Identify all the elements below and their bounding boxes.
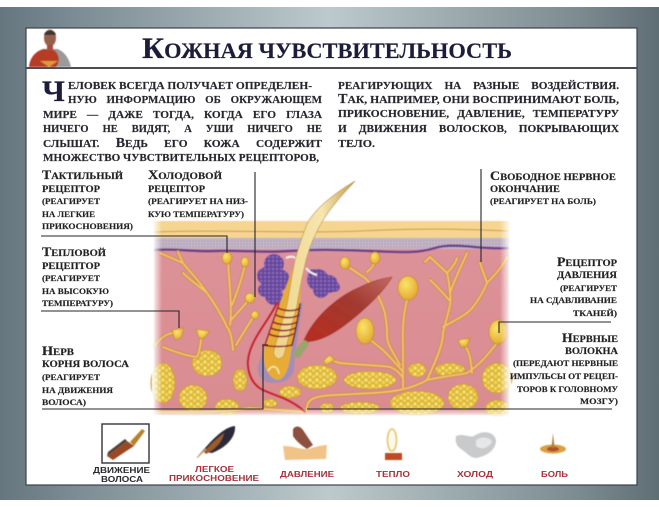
icon: heat	[385, 429, 402, 460]
caption: light touch	[169, 464, 259, 483]
sebaceous glands	[257, 254, 340, 305]
label: pressure receptor: ТКАНЕЙ)	[573, 308, 617, 318]
caption: hair movement: ВОЛОСА	[101, 474, 143, 484]
label: hair root nerve: (РЕАГИРУЕТ	[42, 372, 100, 382]
caption: pain: БОЛЬ	[541, 469, 568, 479]
text block: intro left column: ЕЛОВЕК ВСЕГДА ПОЛУЧАЕТ ОПРЕДЕЛЕН-	[68, 80, 312, 92]
label: hair root nerve: НЕРВ	[42, 344, 75, 358]
label: pressure receptor: НА СДАВЛИВАНИЕ	[530, 295, 617, 305]
text block: intro right column	[338, 80, 619, 150]
dermis	[154, 249, 509, 415]
soft edges	[152, 219, 162, 417]
drop cap: Ч	[42, 75, 65, 108]
text block: intro left column: МИРЕ — ДАЖЕ ТОГДА, КОГДА ЕГО ГЛАЗА	[43, 109, 322, 121]
label: heat receptor	[42, 245, 113, 308]
text block: intro right column: ПРИКОСНОВЕНИЕ, ДАВЛЕНИЕ, ТЕМПЕРАТУРУ	[338, 108, 619, 120]
caption: light touch: ПРИКОСНОВЕНИЕ	[169, 473, 259, 483]
callout lines	[41, 169, 612, 409]
label: hair root nerve: НА ДВИЖЕНИЯ	[42, 385, 113, 395]
label: tactile receptor: ТАКТИЛЬНЫЙ	[42, 168, 124, 182]
label: hair root nerve	[42, 344, 129, 407]
caption: cold: ХОЛОД	[457, 469, 493, 479]
nerve fibres	[154, 252, 507, 412]
label: cold receptor: (РЕАГИРУЕТ НА НИЗ-	[148, 196, 248, 206]
hair shaft	[274, 181, 355, 359]
caption: heat: ТЕПЛО	[376, 469, 410, 479]
label: tactile receptor: (РЕАГИРУЕТ	[42, 196, 100, 206]
text block: intro left column	[42, 75, 323, 164]
epidermis	[154, 221, 509, 241]
label: hair root nerve: КОРНЯ ВОЛОСА	[42, 360, 129, 370]
text block: intro left column: НИЧЕГО НЕ ВИДЯТ, А УШИ НИЧЕГО НЕ	[43, 123, 322, 135]
icon: pressure on skin	[283, 426, 327, 460]
label: cold receptor: РЕЦЕПТОР	[148, 185, 205, 195]
label: cold receptor: КУЮ ТЕМПЕРАТУРУ)	[148, 209, 244, 219]
label: nerve fibres: ИМПУЛЬСЫ ОТ РЕЦЕП-	[510, 371, 618, 381]
caption: hair movement	[93, 465, 150, 484]
label: cold receptor	[148, 168, 248, 219]
label: free nerve ending: СВОБОДНОЕ НЕРВНОЕ	[490, 169, 616, 183]
skin cross-section illustration	[151, 181, 512, 417]
arrector pili muscle	[293, 277, 392, 358]
text block: intro left column: СЛЫШАТ. ВЕДЬ ЕГО КОЖА СОДЕРЖИТ	[43, 135, 323, 150]
text block: intro right column: РЕАГИРУЮЩИХ НА РАЗНЫЕ ВОЗДЕЙСТВИЯ.	[338, 80, 619, 92]
label: nerve fibres: НЕРВНЫЕ	[562, 331, 618, 345]
caption: pressure: ДАВЛЕНИЕ	[280, 469, 334, 479]
text block: intro left column: МНОЖЕСТВО ЧУВСТВИТЕЛЬНЫХ РЕЦЕПТОРОВ,	[43, 152, 319, 164]
label: pressure receptor: (РЕАГИРУЕТ	[560, 283, 617, 293]
label: heat receptor: РЕЦЕПТОР	[42, 262, 100, 272]
icon: feather	[197, 426, 235, 458]
label: nerve fibres: ВОЛОКНА	[565, 347, 618, 357]
label: pressure receptor	[530, 255, 617, 318]
label: free nerve ending: (РЕАГИРУЕТ НА БОЛЬ)	[490, 196, 596, 206]
icon: cold ice	[456, 432, 496, 458]
title: КОЖНАЯ ЧУВСТВИТЕЛЬНОСТЬ	[142, 32, 512, 65]
label: pressure receptor: ДАВЛЕНИЯ	[557, 271, 617, 281]
label: heat receptor: (РЕАГИРУЕТ	[42, 273, 100, 283]
label: nerve fibres: МОЗГУ)	[580, 396, 618, 406]
header rule	[26, 67, 637, 69]
text block: intro right column: И ДВИЖЕНИЯ ВОЛОСКОВ, ПОКРЫВАЮЩИХ	[338, 123, 619, 135]
label: tactile receptor: НА ЛЕГКИЕ	[42, 209, 95, 219]
label: nerve fibres: ТОРОВ К ГОЛОВНОМУ	[517, 384, 619, 394]
label: hair root nerve: ВОЛОСА)	[42, 397, 86, 407]
icon: human figure	[29, 30, 71, 67]
label: free nerve ending	[490, 169, 616, 206]
icon: hair movement brush in frame	[102, 424, 149, 463]
text block: intro left column: НУЮ ИНФОРМАЦИЮ ОБ ОКРУЖАЮЩЕМ	[68, 94, 323, 106]
hair follicle sheath	[258, 300, 303, 383]
label: heat receptor: ТЕПЛОВОЙ	[42, 245, 107, 259]
label: heat receptor: ТЕМПЕРАТУРУ)	[42, 298, 113, 308]
label: tactile receptor: ПРИКОСНОВЕНИЯ)	[42, 221, 133, 231]
label: heat receptor: НА ВЫСОКУЮ	[42, 286, 109, 296]
caption: hair movement: ДВИЖЕНИЕ	[93, 465, 150, 475]
label: tactile receptor	[42, 168, 133, 231]
caption: light touch: ЛЕГКОЕ	[195, 464, 234, 474]
text block: intro right column: ТЕЛО.	[338, 138, 375, 150]
label: tactile receptor: РЕЦЕПТОР	[42, 185, 100, 195]
granular band	[154, 238, 509, 250]
hair root nerve wrap	[248, 303, 305, 412]
basal line	[154, 246, 509, 252]
label: nerve fibres: (ПЕРЕДАЮТ НЕРВНЫЕ	[513, 358, 618, 368]
sensory receptor bulbs	[172, 252, 507, 365]
icon: pain tack	[540, 433, 566, 454]
label: nerve fibres	[510, 331, 619, 406]
label: pressure receptor: РЕЦЕПТОР	[557, 255, 617, 269]
text block: intro right column: ТАК, НАПРИМЕР, ОНИ ВОСПРИНИМАЮТ БОЛЬ,	[338, 91, 619, 106]
fat lobules	[151, 350, 512, 416]
label: free nerve ending: ОКОНЧАНИЕ	[490, 185, 560, 195]
label: cold receptor: ХОЛОДОВОЙ	[148, 168, 223, 182]
